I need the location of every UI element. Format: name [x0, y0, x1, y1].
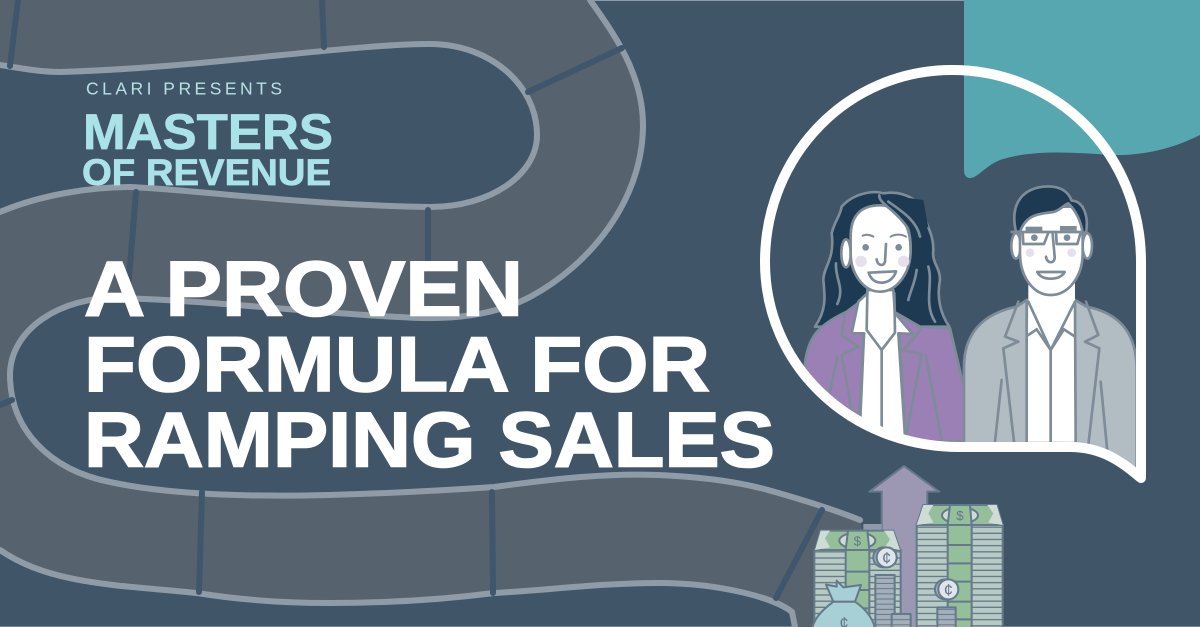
logo: Masters of Revenue: MASTERS — [83, 104, 333, 160]
man — [964, 186, 1137, 470]
coins: ¢ — [944, 580, 953, 599]
woman — [805, 192, 977, 442]
main title: A PROVEN — [84, 244, 523, 332]
left money stack: $ — [854, 534, 862, 549]
coins: ¢ — [882, 548, 891, 567]
right money stack: $ — [956, 508, 964, 523]
left money stack — [814, 531, 901, 627]
main title — [84, 244, 775, 484]
money bag — [812, 581, 875, 627]
main title: RAMPING SALES — [84, 396, 775, 484]
winding road — [0, 0, 880, 627]
logo: Masters of Revenue — [82, 104, 333, 193]
right money stack — [917, 505, 1003, 627]
speech bubble outline — [765, 70, 1141, 478]
main title: FORMULA FOR — [84, 320, 710, 408]
logo: Masters of Revenue: OF REVENUE — [82, 151, 331, 193]
arrow — [869, 466, 939, 627]
money and growth arrow illustration — [812, 466, 1003, 627]
teal speech shape — [964, 0, 1200, 178]
coins — [873, 547, 958, 627]
eyebrow: Clari Presents: CLARI PRESENTS — [86, 78, 282, 98]
presenters illustration — [805, 186, 1137, 470]
